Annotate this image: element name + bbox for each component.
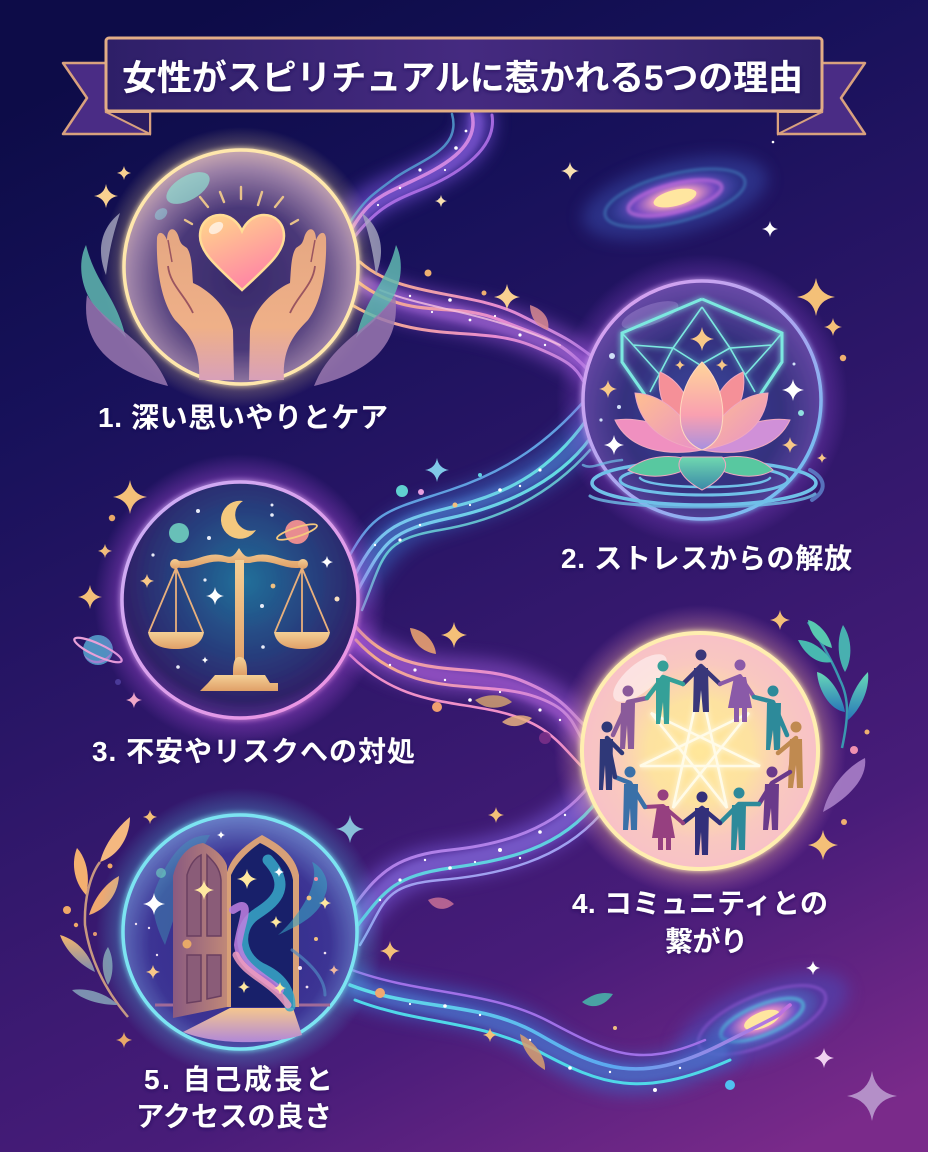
- glass sphere: [123, 815, 357, 1049]
- banner plate: [106, 38, 822, 111]
- floating leaves along ribbons: [410, 305, 613, 1070]
- title: 女性がスピリチュアルに惹かれる5つの理由: [122, 59, 803, 98]
- glass sphere: [583, 281, 821, 519]
- right ribbon tail: [778, 63, 865, 134]
- label 5: アクセスの良さ: [136, 1101, 332, 1132]
- arch frame: [227, 835, 299, 1007]
- flow ribbon: bubble 5 to lower galaxy: [350, 970, 790, 1084]
- lotus: [615, 362, 790, 490]
- water ripples: [583, 460, 823, 507]
- circle of people: [599, 650, 803, 855]
- flow ribbon: bubble 3 to bubble 4: [350, 622, 590, 770]
- sparkle dots along ribbons: [109, 130, 870, 1092]
- panel: bubble 1 care: [81, 127, 401, 407]
- panel: bubble 3 anxiety and risk: [94, 454, 386, 746]
- heart: [200, 215, 284, 290]
- label 4: [572, 888, 828, 957]
- leaves: right of bubble 4: [798, 620, 868, 812]
- crescent moon: [221, 501, 256, 539]
- doorway night sky: [231, 843, 293, 1007]
- label 3: 3. 不安やリスクへの対処: [92, 736, 415, 767]
- side leaves: [81, 213, 401, 386]
- panel: bubble 5 growth: [96, 788, 384, 1076]
- rays: [185, 187, 298, 224]
- ribbon fold left: [106, 112, 150, 134]
- small planet: [72, 634, 124, 666]
- star pattern: [640, 684, 760, 808]
- panel: bubble 4 community: [554, 605, 846, 897]
- label 2: 2. ストレスからの解放: [561, 543, 852, 574]
- flow ribbon: bubble 4 to bubble 5: [352, 785, 600, 945]
- label 4: 繋がり: [665, 925, 748, 957]
- hand right: [249, 229, 326, 380]
- panel: bubble 2 stress release: [556, 254, 848, 546]
- saturn: [276, 520, 318, 544]
- bottom galaxy: [663, 952, 861, 1088]
- bubble stars: [206, 587, 224, 605]
- bubble stars: [143, 893, 165, 915]
- label 5: [136, 1064, 333, 1132]
- light on floor: [183, 1008, 302, 1042]
- label 4: 4. コミュニティとの: [572, 888, 828, 919]
- leaves: left of bubble 5: [60, 817, 130, 1017]
- open door: [173, 843, 227, 1018]
- ribbon fold right: [778, 112, 822, 134]
- flow ribbon: bubble 2 to bubble 3: [350, 400, 596, 610]
- top galaxy: [574, 140, 776, 256]
- glass sphere: [122, 482, 358, 718]
- inner stars: [690, 327, 714, 351]
- loose sparkle stars: [78, 162, 897, 1121]
- title banner: [63, 38, 865, 134]
- planet teal: [169, 523, 189, 543]
- flow ribbon: title to bubble 1: [345, 114, 493, 240]
- left ribbon tail: [63, 63, 150, 134]
- scales: [148, 548, 330, 691]
- label 5: 5. 自己成長と: [144, 1064, 333, 1095]
- shield: [622, 299, 782, 395]
- glass sphere: [582, 633, 818, 869]
- ground line: [155, 1004, 330, 1006]
- hand left: [157, 229, 234, 380]
- flow ribbon: bubble 1 to bubble 2: [352, 262, 590, 388]
- glass sphere: [124, 150, 358, 384]
- doorway ribbons: [233, 860, 327, 1006]
- label 1: 1. 深い思いやりとケア: [98, 402, 388, 433]
